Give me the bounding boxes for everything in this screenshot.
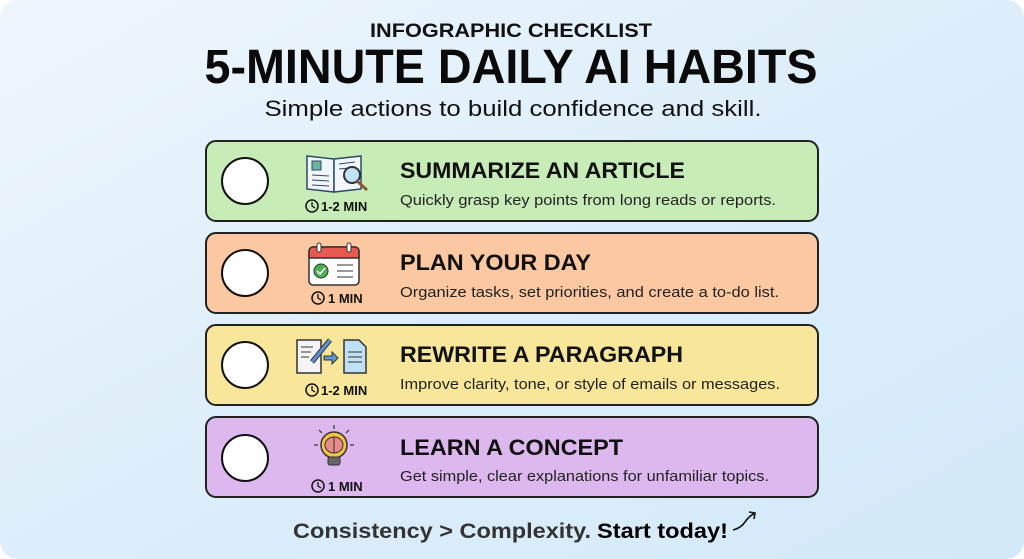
card description: Get simple, clear explanations for unfamiliar topics.	[400, 468, 769, 485]
time label: 1-2 MIN	[321, 199, 367, 214]
checkbox circle	[222, 158, 268, 204]
subtitle: Simple actions to build confidence and skill.	[264, 96, 762, 121]
eyebrow heading: INFOGRAPHIC CHECKLIST	[370, 21, 652, 42]
arrow: squiggle	[733, 512, 755, 530]
icon: lightbulb brain	[314, 425, 354, 465]
card title: SUMMARIZE AN ARTICLE	[400, 158, 685, 183]
time label	[312, 291, 363, 306]
checkbox circle	[222, 435, 268, 481]
time label	[312, 479, 363, 494]
card title: REWRITE A PARAGRAPH	[400, 342, 683, 367]
card: plan	[206, 233, 818, 313]
footer tagline	[293, 520, 728, 543]
card description: Quickly grasp key points from long reads or reports.	[400, 192, 776, 209]
footer tagline: Consistency > Complexity.	[293, 520, 591, 543]
time label: 1 MIN	[328, 479, 363, 494]
card description: Organize tasks, set priorities, and create a to-do list.	[400, 284, 779, 301]
time label: 1-2 MIN	[321, 383, 367, 398]
checkbox circle	[222, 250, 268, 296]
footer tagline: Start today!	[597, 520, 728, 543]
card title: PLAN YOUR DAY	[400, 250, 591, 275]
icon: calendar	[309, 243, 359, 285]
title: 5-MINUTE DAILY AI HABITS	[204, 41, 818, 94]
time label: 1 MIN	[328, 291, 363, 306]
card: rewrite	[206, 325, 818, 405]
card: learn	[206, 417, 818, 497]
card title: LEARN A CONCEPT	[400, 435, 624, 460]
checkbox circle	[222, 342, 268, 388]
card description: Improve clarity, tone, or style of emails or messages.	[400, 376, 780, 393]
card: summarize	[206, 141, 818, 221]
icon: pen to document	[297, 340, 366, 373]
icon: book with magnifier	[307, 156, 367, 192]
